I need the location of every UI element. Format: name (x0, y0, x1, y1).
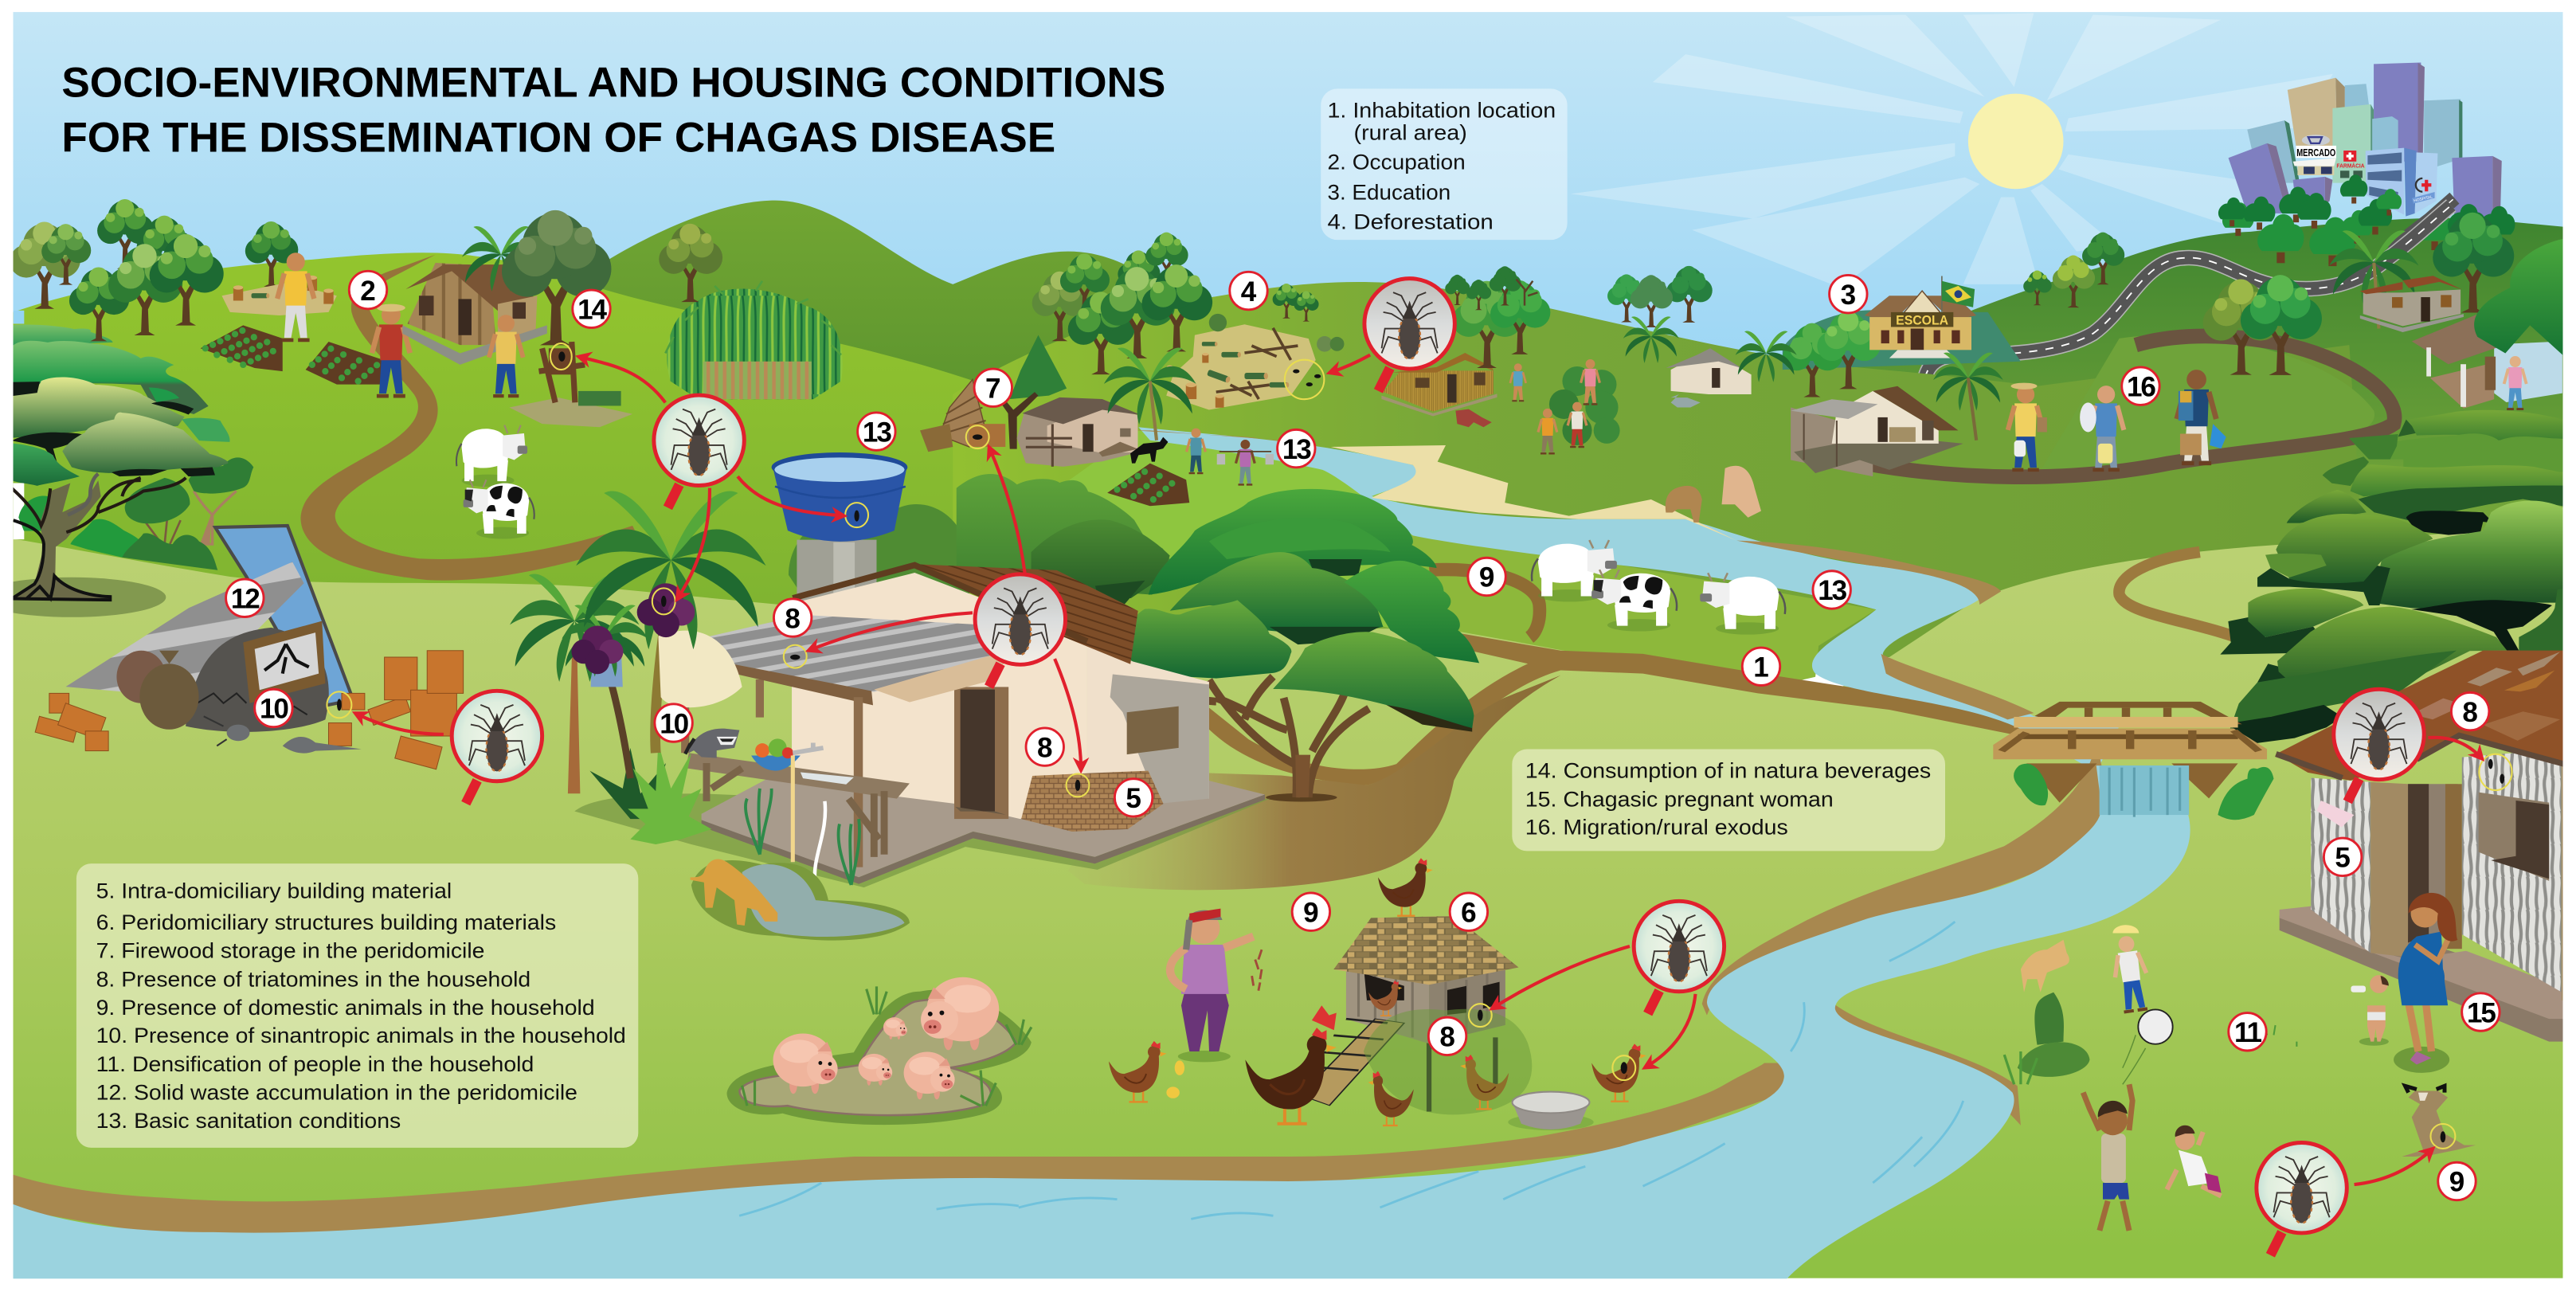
number badges: 2 (360, 276, 376, 307)
panel: items 1 to 4: 1. Inhabitation location (1327, 98, 1556, 122)
palm behind tree (462, 226, 540, 292)
number badges: 15 (2467, 997, 2496, 1028)
right foreground brown paths (2119, 552, 2254, 644)
school: ESCOLA (1896, 313, 1948, 327)
school (1865, 291, 1976, 358)
number badges: 9 (2449, 1167, 2464, 1198)
sun (1968, 94, 2063, 189)
number badges: 14 (577, 295, 607, 326)
tan cows (1666, 466, 1761, 523)
number badges: 7 (985, 374, 1001, 405)
mercado sign (2293, 135, 2336, 175)
number badges: 1 (1753, 652, 1769, 683)
title: SOCIO-ENVIRONMENTAL AND HOUSING CONDITIONS (61, 60, 1165, 107)
firewood stack (920, 379, 1005, 452)
city on the hill (2229, 62, 2502, 219)
back mountains (602, 201, 1135, 381)
fruit bowl (751, 738, 801, 771)
central dirt roads (1068, 631, 2038, 890)
small palm (510, 574, 640, 682)
boy running with dog (2021, 925, 2151, 1012)
number badges: 8 (1439, 1022, 1455, 1053)
bricks (1021, 771, 1164, 832)
raccoon (685, 729, 739, 758)
second palm (562, 605, 648, 677)
door (954, 687, 1008, 819)
trees right of bug callout (1445, 266, 1550, 368)
coffee shrubs with pickers (1538, 359, 1620, 453)
number badges: 9 (1303, 897, 1319, 928)
number badges: 13 (863, 417, 891, 448)
deforested clearing (1166, 314, 1344, 409)
farmacia sign (2336, 151, 2365, 178)
number badges: 16 (2127, 371, 2155, 403)
panel: items 1 to 4: 2. Occupation (1327, 150, 1466, 174)
large pig (921, 977, 999, 1050)
panel: items 5 to 13: 10. Presence of sinantropic animals in the household (96, 1024, 626, 1047)
exposed plaster (1110, 674, 1209, 804)
white cows with spots in pasture (1532, 540, 1785, 635)
three migrants (2008, 370, 2226, 470)
water ripples (739, 922, 1963, 1219)
piglet (859, 1054, 892, 1086)
white cow (456, 425, 527, 487)
water bowl (1508, 1092, 1594, 1130)
title (61, 60, 1165, 161)
panel: items 5 to 13: 8. Presence of triatomines in the household (96, 967, 530, 991)
waterfall (2100, 765, 2189, 817)
right bottom house (2280, 745, 2576, 1042)
magnifier: triatomine upper (654, 395, 744, 507)
child with cat (1455, 409, 1492, 427)
roof tiles (914, 564, 1138, 664)
house floor (702, 763, 1265, 877)
tall dark tree (502, 210, 611, 345)
number badges: 13 (1818, 575, 1847, 606)
sink table (686, 753, 910, 857)
lower river bank (13, 739, 2106, 1235)
yellow water pipe (789, 755, 796, 862)
crop rows lower (1107, 464, 1189, 506)
sky (13, 12, 2563, 355)
agave bright grass (628, 743, 711, 844)
magnifier: triatomine at rubbish (452, 691, 542, 804)
brazilian flag (1942, 276, 1975, 312)
woman in chair (1510, 363, 1526, 401)
panel: items 14 to 16 (1512, 750, 1945, 851)
trees around school (1607, 233, 2124, 397)
upper river (1138, 427, 2120, 772)
baby with bottle (2351, 975, 2389, 1046)
farmer with shovel (277, 253, 314, 340)
panel: items 5 to 13: 11. Densification of people in the household (96, 1052, 534, 1076)
back tree and hedges left (14, 311, 253, 570)
number badges: 6 (1461, 897, 1477, 928)
farmacia sign: FARMÁCIA (2336, 162, 2365, 169)
left hill dirt path (300, 255, 640, 581)
farmer with hat (372, 304, 410, 396)
boy with arms raised (2083, 1084, 2132, 1231)
small field by dirt road (2096, 336, 2374, 429)
spotted cow (464, 480, 534, 539)
sand bank (1331, 445, 1736, 541)
agave dark (589, 748, 666, 819)
green tree far right (2474, 238, 2566, 358)
pig front (904, 1051, 955, 1099)
pig left (773, 1034, 838, 1094)
chicks (1166, 1060, 1184, 1098)
dirt road of migrants (1865, 336, 2394, 477)
crop rows left (201, 325, 388, 385)
bush by stream (2004, 992, 2090, 1084)
left big tree (0, 325, 230, 617)
panel: items 14 to 16: 14. Consumption of in natura beverages (1525, 759, 1931, 783)
dog lying down (2402, 1086, 2476, 1157)
path around the pasture (1429, 570, 1540, 637)
hen with bug (1591, 1043, 1646, 1102)
roof edge (793, 565, 1087, 641)
magnifier: triatomine at clearing (1364, 279, 1454, 391)
old lady (2504, 356, 2527, 409)
panel: items 5 to 13: 5. Intra-domiciliary building material (96, 879, 452, 903)
water tank tower (797, 540, 876, 611)
window (1127, 707, 1179, 754)
trees on path hill (2203, 213, 2514, 375)
man drinking juice at press (489, 315, 632, 427)
road (1918, 199, 2457, 374)
tiled roof of right house (2276, 651, 2576, 781)
far right house with old lady (2412, 305, 2562, 409)
water tank (772, 452, 907, 542)
mud wallow (726, 990, 1032, 1125)
bridge (1993, 702, 2267, 803)
panel: items 5 to 13: 12. Solid waste accumulation in the peridomicile (96, 1080, 577, 1104)
palm trunk by lower house (1150, 382, 1157, 440)
panel: items 5 to 13: 7. Firewood storage in the peridomicile (96, 938, 484, 962)
palms at middle houses (1623, 316, 2003, 440)
rooster (1245, 1005, 1337, 1124)
sick dog (691, 859, 777, 926)
number badges: 5 (1126, 783, 1141, 814)
small house (1666, 348, 1752, 408)
number badges: 5 (2335, 843, 2351, 874)
magnifier: triatomine at dog (2257, 1142, 2347, 1255)
pasture with cows (1411, 535, 1876, 680)
acacia tree (1126, 489, 1479, 802)
hen in coop (1368, 981, 1402, 1016)
foreground land (13, 526, 2563, 1278)
title: FOR THE DISSEMINATION OF CHAGAS DISEASE (61, 114, 1055, 161)
panel: items 1 to 4 (1321, 88, 1568, 240)
top-left tree cluster (10, 199, 298, 341)
panel: items 5 to 13: 13. Basic sanitation conditions (96, 1109, 401, 1133)
conifer and house of firewood (996, 335, 1141, 467)
panel: items 5 to 13: 9. Presence of domestic animals in the household (96, 996, 595, 1020)
number badges: 10 (260, 694, 288, 725)
hen on the roof (1378, 858, 1433, 916)
side wall (1087, 639, 1209, 799)
brown hen by the ramp (1368, 1071, 1414, 1126)
number badges: 8 (2462, 697, 2478, 728)
palm by lower house (1104, 348, 1196, 425)
panel: items 5 to 13 (76, 863, 638, 1148)
panel: items 5 to 13: 6. Peridomiciliary structures building materials (96, 910, 556, 934)
bushes behind house (789, 474, 1170, 605)
sugar cane (665, 281, 843, 399)
palm trunks and laundry (570, 605, 742, 791)
puddle (691, 860, 910, 941)
left hill (13, 253, 974, 605)
triatomine sites (327, 343, 2512, 1149)
large palm (576, 491, 766, 649)
ball (2123, 1009, 2173, 1084)
rubbish pile (65, 526, 353, 732)
city road and trees (2218, 174, 2515, 266)
number badges: 3 (1841, 280, 1856, 311)
hospital sign: HOSPITAL (2414, 195, 2433, 203)
sun rays (1571, 14, 2333, 288)
main house scene (510, 452, 1270, 1125)
number badges (226, 271, 2500, 1200)
light green field by the lower house (1069, 431, 1413, 628)
faucet (793, 743, 824, 753)
red arrows (355, 355, 2482, 1184)
middle hills (953, 282, 2366, 657)
number badges: 8 (785, 603, 801, 634)
acai fruit small (571, 626, 623, 674)
right big foliage (2220, 410, 2576, 746)
number badges: 4 (1241, 276, 1257, 307)
shadow under house (574, 793, 1270, 887)
grass around coop (1364, 1009, 1532, 1114)
coop (1301, 916, 1519, 1112)
hillside cabin (2360, 276, 2464, 332)
clearing and stumps (221, 276, 337, 315)
porch roof (666, 615, 991, 692)
number badges: 8 (1037, 732, 1053, 763)
palm by hillside cabin (2329, 230, 2418, 329)
toddler crawling (2167, 1126, 2221, 1196)
olive hen by the ramp (1460, 1055, 1509, 1109)
pregnant woman (2394, 893, 2458, 1073)
woman feeding hens (1170, 909, 1262, 1062)
river banks (1133, 430, 2034, 719)
number badges: 12 (231, 584, 260, 615)
bushes by bridge (2014, 764, 2273, 820)
number badges: 13 (1282, 434, 1311, 465)
black dog (1130, 437, 1168, 464)
mercado sign: MERCADO (2296, 147, 2335, 159)
magnifier: triatomine at house (975, 574, 1066, 687)
number badges: 11 (2234, 1017, 2262, 1048)
magnifier: triatomine at wall (2334, 689, 2424, 802)
tree cluster near clearing (1032, 233, 1319, 374)
small tufts of grass (2264, 1025, 2296, 1047)
white waste pipe (815, 801, 825, 885)
magnifier: triatomine at coop (1634, 901, 1725, 1014)
wooden house top-left (402, 263, 547, 365)
olive tree (659, 224, 722, 302)
panel: items 1 to 4: 4. Deforestation (1327, 210, 1494, 234)
city hill (1854, 218, 2563, 535)
panel: items 14 to 16: 15. Chagasic pregnant woman (1525, 787, 1834, 811)
porch posts (685, 656, 760, 753)
hospital sign (2412, 178, 2435, 204)
straw hut (1381, 353, 1497, 416)
woman with water pails (1217, 440, 1274, 484)
hen by woman (1109, 1041, 1166, 1102)
acai fruit (637, 583, 695, 637)
piglet top (883, 1017, 907, 1039)
bricks left (35, 651, 464, 769)
rats (204, 716, 362, 754)
back gable wall (792, 573, 1087, 819)
plants by porch (746, 789, 859, 885)
grass tufts in wallow (742, 986, 1032, 1106)
lower river (13, 765, 2190, 1280)
panel: items 1 to 4: (rural area) (1354, 120, 1467, 144)
number badges: 10 (660, 708, 689, 739)
house with porch (1791, 386, 1963, 476)
panel: items 1 to 4: 3. Education (1327, 180, 1450, 204)
panel: items 14 to 16: 16. Migration/rural exodus (1525, 815, 1788, 839)
number badges: 9 (1479, 562, 1494, 593)
man hoeing (1187, 429, 1205, 473)
